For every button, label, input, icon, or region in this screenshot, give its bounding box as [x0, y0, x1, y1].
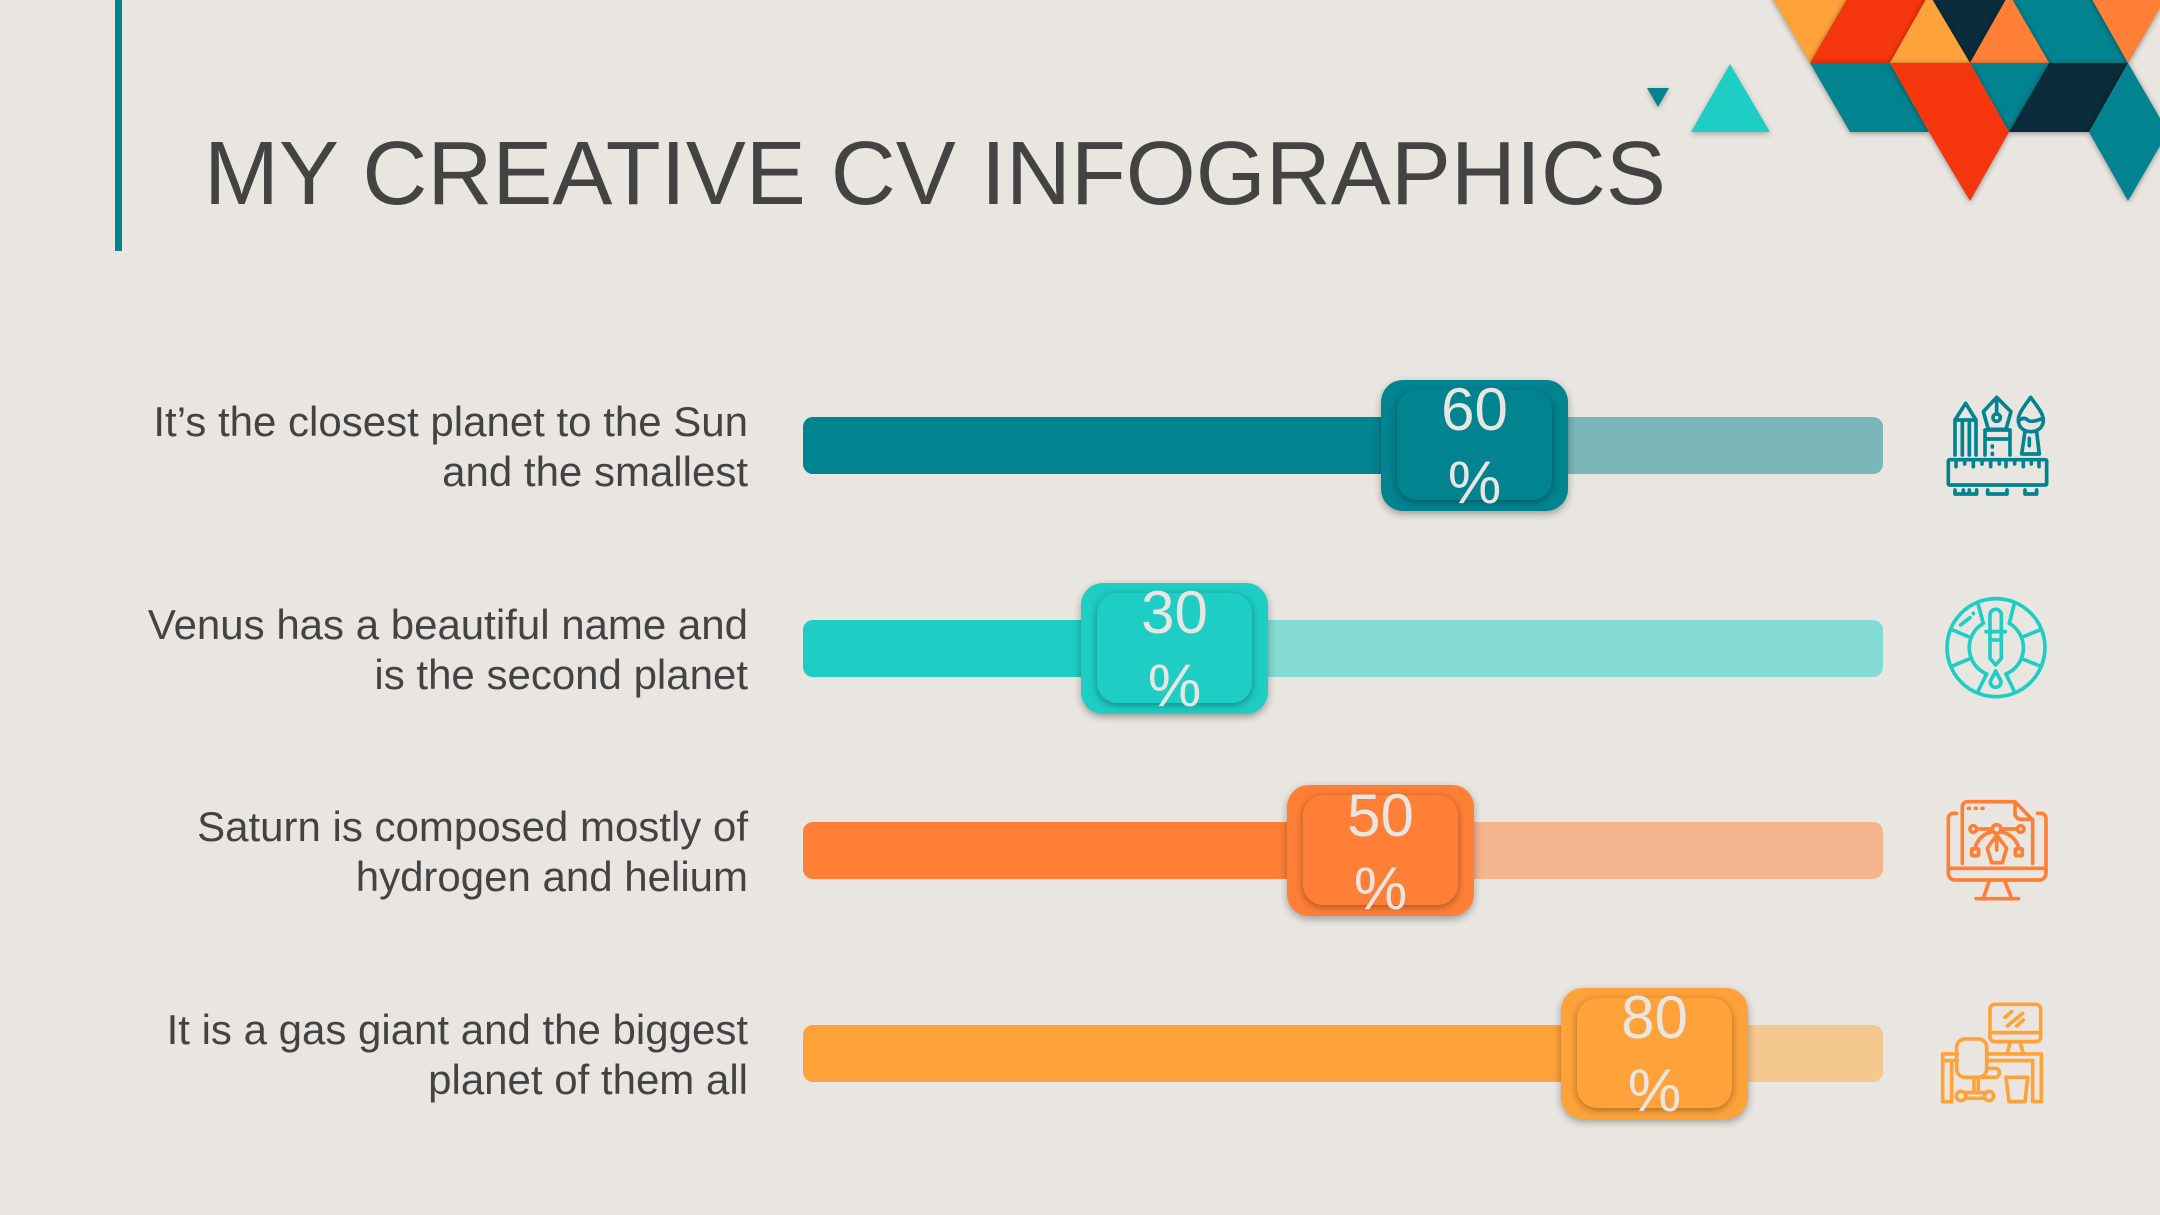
track [803, 1025, 1883, 1082]
handle: 60 [1441, 376, 1508, 443]
label 2 [148, 601, 748, 698]
label 1: It’s the closest planet to the Sun [153, 398, 748, 445]
triangle mosaic decoration [1769, 0, 2160, 204]
row 4: skill bar 80 percent [803, 984, 1883, 1127]
label 4 [167, 1006, 748, 1103]
label 2: is the second planet [374, 651, 748, 698]
handle: % [1148, 652, 1201, 718]
handle: % [1628, 1056, 1681, 1124]
label 3: hydrogen and helium [356, 853, 748, 900]
handle [1287, 785, 1474, 916]
fill [803, 822, 1303, 879]
label 1: and the smallest [442, 448, 748, 495]
row 2: skill bar 30 percent [803, 579, 1883, 722]
label 2: Venus has a beautiful name and [148, 601, 748, 648]
handle [1081, 583, 1268, 714]
small triangles [1646, 64, 1771, 138]
label 1 [153, 398, 748, 495]
accent bar [115, 0, 122, 251]
handle [1381, 380, 1568, 511]
handle: 30 [1141, 579, 1208, 646]
label 3: Saturn is composed mostly of [197, 803, 748, 850]
fill [803, 417, 1403, 474]
row 1: skill bar 60 percent [803, 376, 1883, 519]
handle: % [1354, 854, 1407, 922]
track [803, 620, 1883, 677]
handle: % [1448, 448, 1501, 516]
label 4: It is a gas giant and the biggest [167, 1006, 748, 1053]
label 3 [197, 803, 748, 900]
track [803, 417, 1883, 474]
handle: 50 [1347, 782, 1414, 849]
handle [1561, 988, 1748, 1119]
fill [803, 620, 1103, 677]
track [803, 822, 1883, 879]
label 4: planet of them all [428, 1056, 748, 1103]
fill [803, 1025, 1583, 1082]
title: MY CREATIVE CV INFOGRAPHICS [204, 124, 1666, 224]
row 3: skill bar 50 percent [803, 782, 1883, 924]
handle: 80 [1621, 984, 1688, 1051]
